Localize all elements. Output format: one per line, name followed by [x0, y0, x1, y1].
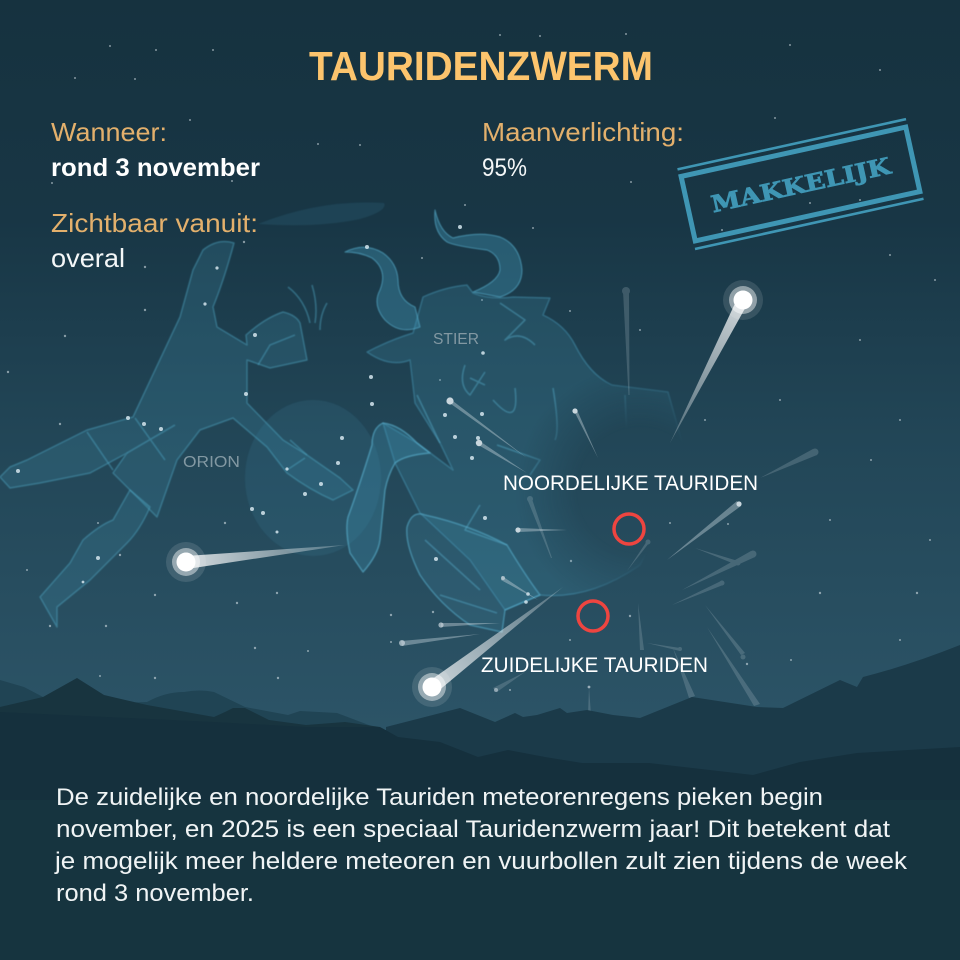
- info: visible from: [51, 208, 258, 273]
- meteor heads, medium: [399, 397, 742, 692]
- constellation stars: [16, 225, 530, 604]
- stamp: difficulty: MAKKELIJK: [709, 152, 894, 218]
- body text: rond 3 november.: [56, 880, 254, 907]
- title: TAURIDENZWERM: [309, 43, 653, 89]
- meteor: top right bright: [670, 280, 763, 443]
- mountains: front range and ground: [0, 712, 960, 960]
- body text: je mogelijk meer heldere meteoren en vuurbollen zult zien tijdens de week: [54, 848, 908, 875]
- Orion leg: [40, 490, 150, 627]
- constellation: Orion: [0, 202, 384, 627]
- info: visible from: Zichtbaar vanuit:: [51, 208, 258, 238]
- bull front leg: [347, 423, 430, 572]
- info: moonlight: [482, 117, 684, 182]
- background: night sky: [0, 0, 960, 730]
- faint meteors: [399, 287, 818, 715]
- bull body and head: [367, 285, 690, 610]
- radiant marker: south: [578, 601, 608, 631]
- info: moonlight: Maanverlichting:: [482, 117, 684, 147]
- label: southern Taurids: ZUIDELIJKE TAURIDEN: [481, 654, 708, 677]
- meteor: left bright: [166, 542, 345, 582]
- info: when: rond 3 november: [51, 154, 260, 182]
- meteor tails, dim: [493, 287, 818, 715]
- body text: [54, 784, 908, 907]
- Orion club: [258, 202, 384, 225]
- label: Orion: ORION: [183, 454, 240, 471]
- constellation: Taurus bull: [345, 210, 690, 632]
- bull face details: [417, 303, 627, 613]
- info: visible from: overal: [51, 243, 125, 273]
- meteor tails, medium: [401, 398, 741, 646]
- Orion shield: [245, 400, 381, 556]
- bull folded leg: [407, 514, 540, 632]
- mountains: back ranges: [0, 645, 960, 790]
- bull left horn: [345, 247, 420, 330]
- info: when: [51, 117, 260, 182]
- radiant marker: north: [614, 514, 644, 544]
- bull right horn: [435, 210, 522, 297]
- lower panel background: [0, 800, 960, 960]
- label: Stier: STIER: [433, 331, 479, 348]
- body text: De zuidelijke en noordelijke Tauriden meteorenregens pieken begin: [56, 784, 823, 811]
- stamp: difficulty: [677, 118, 924, 250]
- Orion hair and details: [87, 285, 327, 470]
- meteor: bottom bright: [412, 587, 563, 707]
- Orion body and arms: [0, 242, 353, 517]
- body text: november, en 2025 is een speciaal Tauridenzwerm jaar! Dit betekent dat: [56, 816, 890, 843]
- info: moonlight: 95%: [482, 154, 527, 182]
- label: northern Taurids: NOORDELIJKE TAURIDEN: [503, 472, 758, 495]
- stars: [7, 33, 936, 691]
- info: when: Wanneer:: [51, 117, 167, 147]
